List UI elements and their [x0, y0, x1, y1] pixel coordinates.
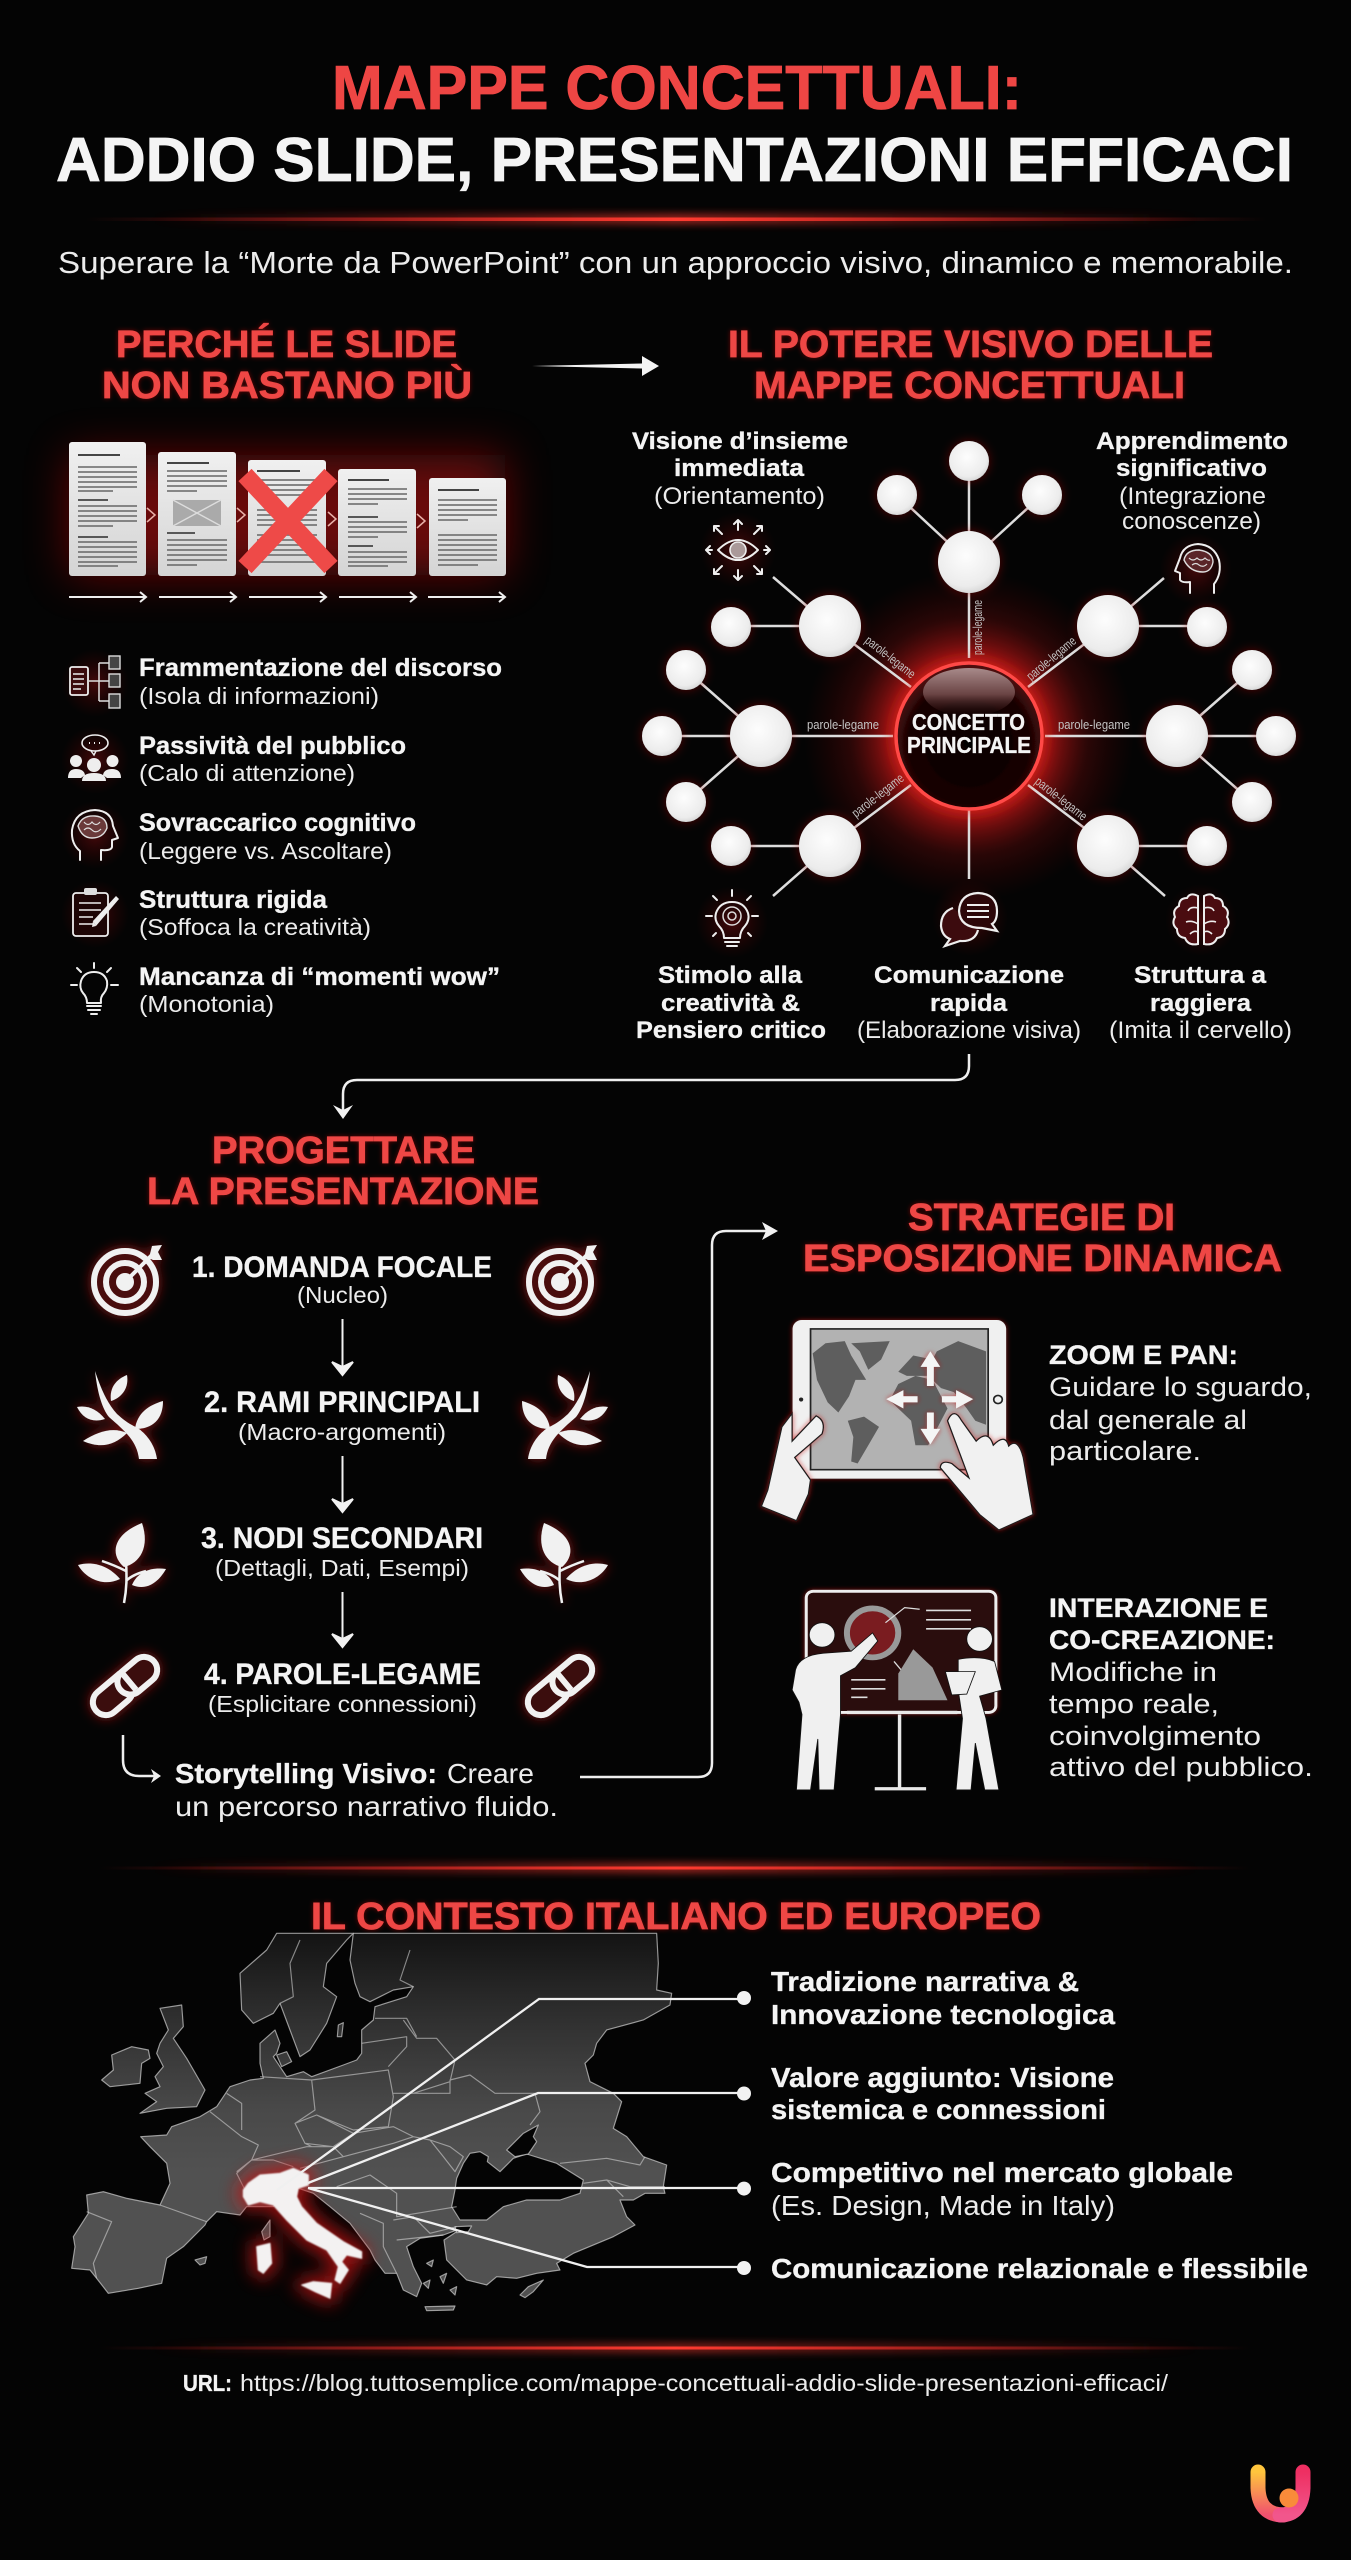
storytelling text	[175, 1758, 558, 1822]
title: MAPPE CONCETTUALI:	[332, 54, 1022, 123]
arrow: map to design section	[333, 1054, 969, 1119]
label: stimolo alla creatività: creatività &	[661, 990, 800, 1017]
linking words: parole-legame	[1058, 717, 1130, 732]
header divider	[86, 214, 1267, 224]
item: comunicazione relazionale: Comunicazione relazionale e flessibile	[771, 2253, 1308, 2284]
arrow step 1-2	[332, 1319, 353, 1375]
step 1	[192, 1251, 492, 1308]
linking words: parole-legame	[849, 770, 907, 820]
step 2	[204, 1386, 480, 1445]
map of europe	[72, 1933, 672, 2311]
item: tradizione: Tradizione narrativa &	[771, 1966, 1079, 1997]
arrow: slides to maps	[532, 356, 659, 376]
icon: brain	[1165, 884, 1237, 956]
label: apprendimento significativo: significativo	[1116, 455, 1267, 482]
concept map	[632, 428, 1296, 1044]
label: struttura a raggiera	[1109, 962, 1292, 1044]
slide 2	[158, 452, 236, 576]
item: struttura: (Soffoca la creatività)	[139, 914, 371, 940]
heading	[147, 1130, 539, 1213]
item: competitivo: Competitivo nel mercato globale	[771, 2157, 1233, 2188]
icon: head with brain	[1160, 533, 1232, 605]
label: comunicazione rapida: (Elaborazione visiva)	[857, 1017, 1081, 1044]
list: problems with slides	[61, 649, 502, 1017]
item: passività: (Calo di attenzione)	[139, 760, 355, 786]
item: competitivo: (Es. Design, Made in Italy)	[771, 2190, 1115, 2221]
item: valore aggiunto	[771, 2062, 1114, 2125]
heading	[803, 1197, 1282, 1280]
text: zoom e pan	[1049, 1340, 1312, 1466]
panel: strategie di esposizione dinamica	[761, 1197, 1313, 1790]
heading: STRATEGIE DI	[908, 1197, 1175, 1239]
linking words: parole-legame	[807, 717, 879, 732]
central concept: PRINCIPALE	[907, 732, 1031, 758]
linking words	[807, 600, 1130, 824]
label: stimolo alla creatività	[636, 962, 826, 1044]
slide 5	[429, 478, 506, 576]
item: mancanza: Mancanza di “momenti wow”	[139, 963, 500, 991]
label: comunicazione rapida: Comunicazione	[874, 962, 1064, 989]
step 3: 3. NODI SECONDARI	[201, 1522, 483, 1555]
label: visione d'insieme	[632, 428, 848, 510]
item: tradizione	[771, 1966, 1115, 2030]
item: struttura	[61, 880, 371, 948]
panel: progettare la presentazione	[77, 1130, 608, 1822]
item: mancanza: (Monotonia)	[139, 991, 274, 1017]
connector lines	[662, 461, 1276, 896]
step 4: (Esplicitare connessioni)	[208, 1691, 477, 1717]
country borders	[87, 1940, 665, 2278]
heading: il potere visivo: IL POTERE VISIVO DELLE	[728, 324, 1213, 366]
label: struttura a raggiera: raggiera	[1150, 990, 1252, 1017]
heading: il potere visivo	[728, 324, 1213, 407]
linking words: parole-legame	[1023, 633, 1079, 683]
text: zoom e pan: ZOOM E PAN:	[1049, 1340, 1238, 1370]
arrow to storytelling	[123, 1735, 161, 1783]
item: valore aggiunto: Valore aggiunto: Visione	[771, 2062, 1114, 2093]
heading: perché le slide non bastano più: NON BASTANO PIÙ	[102, 363, 472, 407]
step 1: (Nucleo)	[297, 1282, 388, 1308]
heading: perché le slide non bastano più: PERCHÉ LE SLIDE	[116, 322, 457, 366]
title: ADDIO SLIDE, PRESENTAZIONI EFFICACI	[56, 126, 1293, 195]
step 4: 4. PAROLE-LEGAME	[204, 1658, 481, 1691]
slide 3	[248, 460, 326, 576]
text: interazione e co-creazione: coinvolgimento	[1049, 1721, 1261, 1751]
label: struttura a raggiera: Struttura a	[1134, 962, 1267, 989]
arrow: design to strategies	[580, 1222, 778, 1777]
step 1: 1. DOMANDA FOCALE	[192, 1251, 492, 1284]
text: interazione e co-creazione: attivo del pubblico.	[1049, 1752, 1313, 1782]
illustration: co-creation at board	[792, 1591, 1002, 1790]
label: apprendimento significativo	[1096, 428, 1288, 535]
step 3: (Dettagli, Dati, Esempi)	[215, 1555, 469, 1581]
text: interazione e co-creazione: Modifiche in	[1049, 1657, 1217, 1687]
text: interazione e co-creazione: CO-CREAZIONE:	[1049, 1625, 1275, 1655]
item: frammentazione: (Isola di informazioni)	[139, 683, 379, 709]
section divider	[100, 1863, 1250, 1873]
step 3	[201, 1522, 483, 1581]
arrow step 2-3	[332, 1456, 353, 1512]
label: visione d'insieme: immediata	[674, 455, 805, 482]
chevrons between slides	[147, 508, 425, 528]
text: interazione e co-creazione	[1049, 1593, 1313, 1782]
list: contesto italiano	[771, 1966, 1308, 2284]
label: visione d'insieme: Visione d’insieme	[632, 428, 848, 455]
label: stimolo alla creatività: Stimolo alla	[658, 962, 803, 989]
text: interazione e co-creazione: tempo reale,	[1049, 1689, 1219, 1719]
heading: PROGETTARE	[212, 1130, 475, 1172]
italy	[243, 2168, 362, 2298]
illustration: tablet with hands	[761, 1320, 1033, 1530]
callout lines from italy	[277, 1991, 751, 2275]
icon: eye with arrows	[700, 512, 776, 588]
item: sovraccarico	[61, 801, 416, 869]
item: frammentazione	[61, 649, 502, 717]
linking words: parole-legame	[970, 600, 985, 655]
heading: il contesto italiano ed europeo: IL CONTESTO ITALIANO ED EUROPEO	[311, 1896, 1041, 1938]
heading: LA PRESENTAZIONE	[147, 1171, 539, 1213]
step 2: (Macro-argomenti)	[238, 1419, 446, 1445]
text: interazione e co-creazione: INTERAZIONE E	[1049, 1593, 1268, 1623]
label: apprendimento significativo: Apprendimento	[1096, 428, 1288, 455]
title	[56, 54, 1293, 195]
italy halo	[243, 2168, 362, 2298]
label: struttura a raggiera: (Imita il cervello)	[1109, 1017, 1292, 1044]
label: stimolo alla creatività: Pensiero critico	[636, 1017, 826, 1044]
icons: links	[88, 1652, 597, 1720]
icon: creative bulb	[696, 886, 768, 958]
step 4	[204, 1658, 481, 1717]
seas	[452, 2125, 583, 2233]
linking words: parole-legame	[1032, 774, 1090, 824]
text: zoom e pan: dal generale al	[1049, 1405, 1247, 1435]
central glow	[804, 571, 1134, 901]
logo	[1258, 2472, 1303, 2515]
arrow step 3-4	[332, 1592, 353, 1647]
item: mancanza	[71, 963, 500, 1017]
item: competitivo	[771, 2157, 1233, 2221]
timeline arrows	[69, 592, 505, 602]
footer divider	[100, 2343, 1250, 2353]
source url: https://blog.tuttosemplice.com/mappe-concettuali-addio-slide-presentazioni-efficaci/	[240, 2370, 1169, 2396]
item: tradizione: Innovazione tecnologica	[771, 1999, 1115, 2030]
source url: URL:	[183, 2370, 232, 2396]
icon: chat bubbles	[932, 880, 1008, 956]
subtitle: Superare la “Morte da PowerPoint” con un approccio visivo, dinamico e memorabile.	[58, 245, 1293, 280]
item: valore aggiunto: sistemica e connessioni	[771, 2094, 1106, 2125]
hands	[761, 1413, 1033, 1530]
storytelling text: Creare	[447, 1758, 534, 1789]
central concept	[896, 663, 1042, 809]
item: sovraccarico: (Leggere vs. Ascoltare)	[139, 838, 392, 864]
item: struttura: Struttura rigida	[139, 886, 328, 914]
item: passività	[61, 726, 406, 794]
step 2: 2. RAMI PRINCIPALI	[204, 1386, 480, 1419]
nodes	[642, 441, 1296, 877]
storytelling text: un percorso narrativo fluido.	[175, 1791, 558, 1822]
label: comunicazione rapida: rapida	[930, 990, 1008, 1017]
central concept: CONCETTO	[912, 709, 1025, 735]
red cross	[245, 475, 331, 567]
heading: il potere visivo: MAPPE CONCETTUALI	[754, 365, 1185, 407]
text: zoom e pan: Guidare lo sguardo,	[1049, 1372, 1312, 1402]
item: frammentazione: Frammentazione del discorso	[139, 654, 502, 682]
label: visione d'insieme: (Orientamento)	[654, 483, 825, 510]
storytelling text: Storytelling Visivo:	[175, 1758, 437, 1789]
landmass	[72, 1933, 672, 2311]
slide 1	[69, 442, 146, 576]
label: apprendimento significativo: conoscenze)	[1122, 508, 1261, 535]
label: comunicazione rapida	[857, 962, 1081, 1044]
icons: leaves	[78, 1523, 608, 1603]
label: apprendimento significativo: (Integrazione	[1119, 483, 1266, 510]
slide sequence	[69, 442, 506, 602]
item: passività: Passività del pubblico	[139, 732, 406, 760]
text: zoom e pan: particolare.	[1049, 1436, 1201, 1466]
icons: targets	[94, 1245, 597, 1313]
icons: branches	[77, 1371, 608, 1459]
heading: perché le slide non bastano più	[102, 322, 472, 407]
heading: ESPOSIZIONE DINAMICA	[803, 1238, 1282, 1280]
linking words: parole-legame	[862, 633, 919, 681]
item: sovraccarico: Sovraccarico cognitivo	[139, 809, 416, 837]
slide 4	[338, 469, 416, 576]
italy shape	[243, 2168, 362, 2298]
